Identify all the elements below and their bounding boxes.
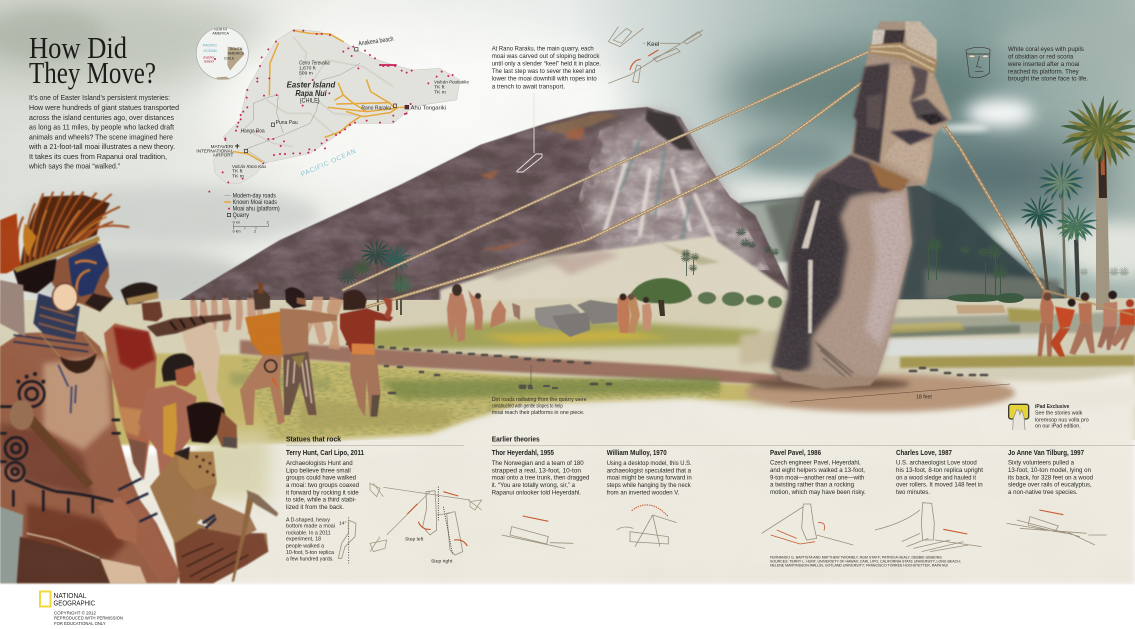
Love theory: on a wood sledge and hauled it [896, 474, 976, 481]
loin cloth [17, 537, 147, 583]
intro text: animals and wheels? The scene imagined here [29, 134, 173, 141]
iPad exclusive callout: iPad Exclusive [1035, 404, 1069, 410]
quarry annotation text [492, 46, 601, 90]
map labels: INTERNATIONAL [196, 148, 234, 153]
carved club [23, 413, 93, 488]
Mulloy theory: moai might be swung forward in [607, 475, 692, 482]
leader to quarry moai [517, 93, 542, 172]
locator globe: SOUTH [230, 47, 243, 51]
locator globe: PACIFIC [203, 44, 217, 48]
dirt road annotation: Dirt roads radiating from the quarry were [492, 397, 587, 403]
Pavel theory [762, 448, 866, 545]
Van Tilburg theory: 13-foot, 10-ton model, lying on [1008, 467, 1091, 474]
axe [232, 492, 255, 582]
Heyerdahl theory: strapped a real, 13-foot, 10-ton [492, 467, 581, 474]
main warrior torso [0, 332, 180, 583]
map legend: 0 km [233, 230, 241, 234]
right forearm and hands [120, 483, 180, 582]
body tattoos [0, 381, 121, 513]
intro text: with a 21-foot-tall moai illustrates a new theory. [28, 144, 175, 151]
panel: statues that rock: groups could have walked [286, 475, 356, 482]
map legend: Moai ahu (platform) [233, 207, 280, 213]
map labels: MATAVERI [211, 144, 233, 149]
moai ground shadow: reddish sand [745, 374, 1015, 412]
head and face paint [50, 240, 113, 312]
earring [52, 283, 78, 311]
known moai roads [233, 31, 407, 162]
intro text: It’s one of Easter Island’s persistent mysteries: [29, 95, 170, 102]
Van Tilburg theory: a non-native tree species. [1008, 489, 1078, 496]
dirt road annotation: moai reach their platforms in one piece. [492, 410, 585, 416]
iPad exclusive callout [1009, 404, 1089, 430]
Van Tilburg theory: its back, for 328 feet on a wood [1008, 474, 1093, 481]
locator globe: Easter [203, 56, 215, 60]
map labels: TK ft [434, 85, 445, 91]
panel: statues that rock: experiment, 18 [286, 537, 321, 543]
Mulloy theory: steps while hanging by the neck [607, 482, 691, 489]
intro text: as long as 11 miles, by people who lacked draft [29, 124, 174, 132]
eyes annotation text: White coral eyes with pupils [1008, 46, 1085, 53]
credits: FERNANDO G. BAPTISTA AND MATTHEW TWOMBLY, NGM STAFF; PATRICIA HEALY, DEBBIE GIBBONS [770, 556, 942, 560]
Heyerdahl theory [492, 448, 590, 548]
intro text [28, 95, 179, 170]
locator globe: OCEAN [203, 49, 217, 53]
paper panel [0, 372, 1135, 629]
iPad exclusive callout: See the stories walk [1035, 411, 1082, 417]
eyes annotation text: reached its platform. They [1008, 68, 1079, 75]
National Geographic logo and copyright: NATIONAL [54, 593, 87, 600]
Pavel theory: and eight helpers walked a 13-foot, [770, 467, 865, 474]
dirt road annotation [492, 365, 587, 416]
top of head [872, 30, 885, 45]
panel: statues that rock: to side, while a third stabi- [286, 497, 356, 504]
ground and road [0, 295, 1135, 445]
map labels: Ahu Tongariki [411, 106, 446, 112]
map legend: 0 mi [233, 220, 240, 224]
neck shadow [823, 155, 907, 193]
rock on left [0, 507, 23, 583]
Mulloy theory: archaeologist speculated that a [607, 467, 691, 474]
large palm trees, right [1020, 94, 1135, 310]
Heyerdahl theory: it. “You are totally wrong, sir,” a [492, 482, 575, 489]
man in orange paint [245, 312, 292, 357]
child warrior [138, 385, 197, 477]
map labels: TK m [434, 90, 446, 96]
panel: statues that rock: lized it from the back. [286, 504, 344, 511]
panel: statues that rock: a few hundred yards. [286, 557, 334, 563]
Van Tilburg theory: sledge over rails of eucalyptus, [1008, 482, 1092, 489]
necks and tattoos [33, 293, 80, 340]
locator globe: AMERICA [228, 51, 245, 55]
moai ahu dots [209, 31, 453, 192]
Love theory: over rollers. It moved 148 feet in [896, 482, 983, 489]
map legend [224, 194, 280, 234]
locator globe: CHILE [224, 56, 235, 60]
Rano Raraku mountain [180, 107, 790, 320]
mid-distance people [447, 284, 652, 342]
right mountain range [740, 183, 1065, 310]
18 feet dimension: 18 feet [916, 394, 932, 400]
Van Tilburg theory: Jo Anne Van Tilburg, 1997 [1008, 448, 1084, 457]
National Geographic logo and copyright: GEOGRAPHIC [54, 600, 95, 608]
credits: HELENE MARTINSSON-WALLIN, GOTLAND UNIVERSITY; FRANCISCO TORRES HOCHSTETTER, RAPA NUI [770, 564, 948, 568]
map labels: Volcán Rano Kau [232, 164, 266, 170]
eyes annotation text [1007, 46, 1088, 83]
quarry annotation text: moai was carved out of sloping bedrock [492, 53, 600, 60]
keel diagram: Keel [647, 41, 659, 48]
map labels: PACIFIC OCEAN [300, 148, 358, 178]
panel: statues that rock: Terry Hunt, Carl Lipo, 2011 [286, 448, 364, 457]
panel: statues that rock: bottom made a moai [286, 524, 335, 530]
hand fingers [815, 342, 853, 378]
people pulling rope, right [1038, 290, 1135, 357]
main moai statue [772, 22, 952, 388]
fallen moai [535, 300, 618, 337]
map labels: Cerro Terevaka [299, 60, 330, 66]
quarry annotation text: a trench to await transport. [492, 83, 565, 90]
National Geographic logo and copyright: COPYRIGHT © 2012 [54, 610, 96, 616]
stones along road [347, 344, 987, 393]
back figure in pale paint [180, 323, 224, 407]
map labels: Easter Island [287, 79, 336, 89]
credits [770, 556, 961, 568]
panel: statues that rock [286, 435, 364, 563]
hair and feather headdress [13, 258, 57, 293]
Pavel theory: a twisting rather than a rocking [770, 482, 854, 489]
Love theory: U.S. archaeologist Love stood [896, 460, 977, 467]
mid foreground men with ropes [240, 283, 393, 425]
map labels: Volcán Poukatike [434, 80, 469, 86]
Love theory: Charles Love, 1987 [896, 448, 952, 457]
head dark side [853, 63, 891, 163]
map legend: Modern-day roads [233, 194, 276, 200]
map legend: Quarry [233, 213, 249, 219]
Mulloy theory [607, 448, 692, 547]
diagram: rocking moai [338, 483, 482, 564]
map labels: TK ft [232, 169, 243, 175]
Heyerdahl theory: Thor Heyerdahl, 1955 [492, 448, 554, 457]
quarry annotation text: The last step was to sever the keel and [492, 68, 596, 75]
chin underside [868, 162, 910, 192]
map labels: Puna Pau [276, 120, 298, 126]
map labels [196, 36, 469, 179]
Heyerdahl theory: Rapanui onlooker told Heyerdahl. [492, 489, 581, 496]
eyes annotation text: of obsidian or red scoria [1008, 53, 1074, 60]
National Geographic logo and copyright: REPRODUCED WITH PERMISSION [54, 616, 123, 621]
keel diagram [608, 27, 703, 83]
map labels: 509 m [299, 70, 313, 76]
Love theory [875, 448, 983, 552]
panel: statues that rock: rockable. In a 2011 [286, 530, 331, 536]
panel: statues that rock: people walked a [286, 544, 325, 550]
map labels: TK m [232, 173, 244, 179]
quarry annotation text: lower the moai downhill with ropes into [492, 75, 597, 82]
quarry markers [244, 48, 397, 153]
iPad exclusive callout: loremsop nus volla pro [1035, 417, 1089, 423]
locator globe [196, 27, 248, 79]
man in striped loincloth [280, 308, 337, 357]
foreground warriors [0, 192, 278, 583]
upper rope [343, 52, 868, 290]
credits: SOURCES: TERRY L. HUNT, UNIVERSITY OF HAWAII; CARL LIPO, CALIFORNIA STATE UNIVERSITY, LONG BEACH; [770, 560, 961, 564]
map labels: Anakena beach [358, 36, 394, 48]
crouching warrior [150, 452, 268, 583]
inset map: Easter Island [196, 27, 469, 192]
distant crowd, far left [190, 294, 263, 334]
panel: statues that rock: a moai: two groups coaxed [286, 482, 359, 489]
panel: statues that rock: 10-foot, 5-ton replica [286, 550, 335, 556]
Van Tilburg theory: Sixty volunteers pulled a [1008, 460, 1074, 467]
dark left side [772, 163, 880, 380]
panel: statues that rock: Statues that rock [286, 435, 341, 444]
eyes annotation text: were inserted after a moai [1007, 61, 1080, 68]
Mulloy theory: William Mulloy, 1970 [607, 448, 667, 457]
Pavel theory: 9-ton moai—another real one—with [770, 474, 865, 481]
quarry annotation text: At Rano Raraku, the main quarry, each [492, 46, 594, 53]
intro text: which says the moai “walked.” [28, 164, 121, 170]
diagram: rocking moai: 14° [339, 521, 347, 527]
map labels: Rano Raraku [361, 106, 391, 112]
second warrior, red shoulder [104, 323, 157, 480]
face [880, 63, 952, 185]
sky [0, 0, 1135, 340]
map labels: (CHILE) [300, 99, 320, 105]
iPad exclusive callout: on our iPad edition. [1035, 424, 1081, 430]
panel: earlier theories [492, 435, 1107, 552]
Van Tilburg theory [1007, 448, 1107, 545]
background palms and trees near mountain [630, 226, 1024, 316]
title [29, 30, 156, 90]
map legend: 2 [254, 230, 256, 234]
moai face icon [966, 47, 990, 78]
map labels: Rapa Nui [295, 88, 327, 98]
eyes annotation text: brought the stone face to life. [1008, 76, 1088, 83]
map labels: AIRPORT [213, 153, 233, 158]
map labels: 1,670 ft [299, 65, 316, 71]
map legend: 2 [267, 220, 269, 224]
dirt road annotation: constructed with gentle slopes to help [492, 404, 563, 410]
Love theory: two minutes. [896, 489, 930, 496]
panel: statues that rock: Lipo believe three small [286, 467, 351, 474]
title: They Move? [29, 55, 156, 90]
palms behind the pullers, mid-left group [337, 238, 414, 315]
Mulloy theory: from an inverted wooden V. [607, 489, 680, 496]
map labels: Hanga Roa [241, 129, 265, 135]
title: How Did [29, 30, 127, 65]
Love theory: his 13-foot, 8-ton replica upright [896, 467, 983, 474]
rope band around head [868, 43, 937, 75]
panel: statues that rock: A D-shaped, heavy [286, 517, 330, 523]
18 feet dimension [790, 384, 1010, 402]
quarry annotation text: until only a slender “keel” held it in place. [492, 61, 601, 68]
Pavel theory: motion, which may have been risky. [770, 489, 866, 496]
intro text: How were hundreds of giant statues transported [29, 105, 179, 112]
intro text: It takes its cues from Rapanui oral tradition, [29, 154, 167, 161]
locator globe: AMERICA [212, 32, 230, 36]
map legend: Known Moai roads [233, 200, 277, 206]
panel: statues that rock: it forward by rocking it side [286, 489, 359, 496]
diagram: rocking moai: Step right [431, 558, 453, 564]
locator globe: Island [204, 60, 215, 64]
Heyerdahl theory: The Norwegian and a team of 180 [492, 460, 584, 467]
National Geographic logo and copyright [40, 592, 123, 626]
ropes pulling from the moai [343, 52, 1043, 307]
Heyerdahl theory: moai onto a tree trunk, then dragged [492, 475, 590, 482]
panel: statues that rock: Archaeologists Hunt and [286, 460, 353, 467]
outstretched tattooed arm [147, 314, 232, 337]
modern roads [240, 63, 360, 163]
intro text: across the island centuries ago, over distances [29, 115, 174, 122]
island shape [213, 29, 460, 183]
diagram: rocking moai: Step left [405, 537, 424, 543]
Pavel theory: Pavel Pavel, 1986 [770, 448, 821, 457]
locator globe: NORTH [214, 28, 227, 32]
man in red paint with rope in hands [340, 308, 393, 353]
lit lower body [817, 187, 912, 377]
far crowd, pale men behind [307, 297, 327, 347]
Mulloy theory: Using a desktop model, this U.S. [607, 460, 692, 467]
panel: earlier theories: Earlier theories [492, 435, 540, 444]
Pavel theory: Czech engineer Pavel, Heyerdahl, [770, 460, 861, 467]
section rules [286, 444, 1135, 446]
National Geographic logo and copyright: FOR EDUCATIONAL ONLY [54, 621, 106, 626]
